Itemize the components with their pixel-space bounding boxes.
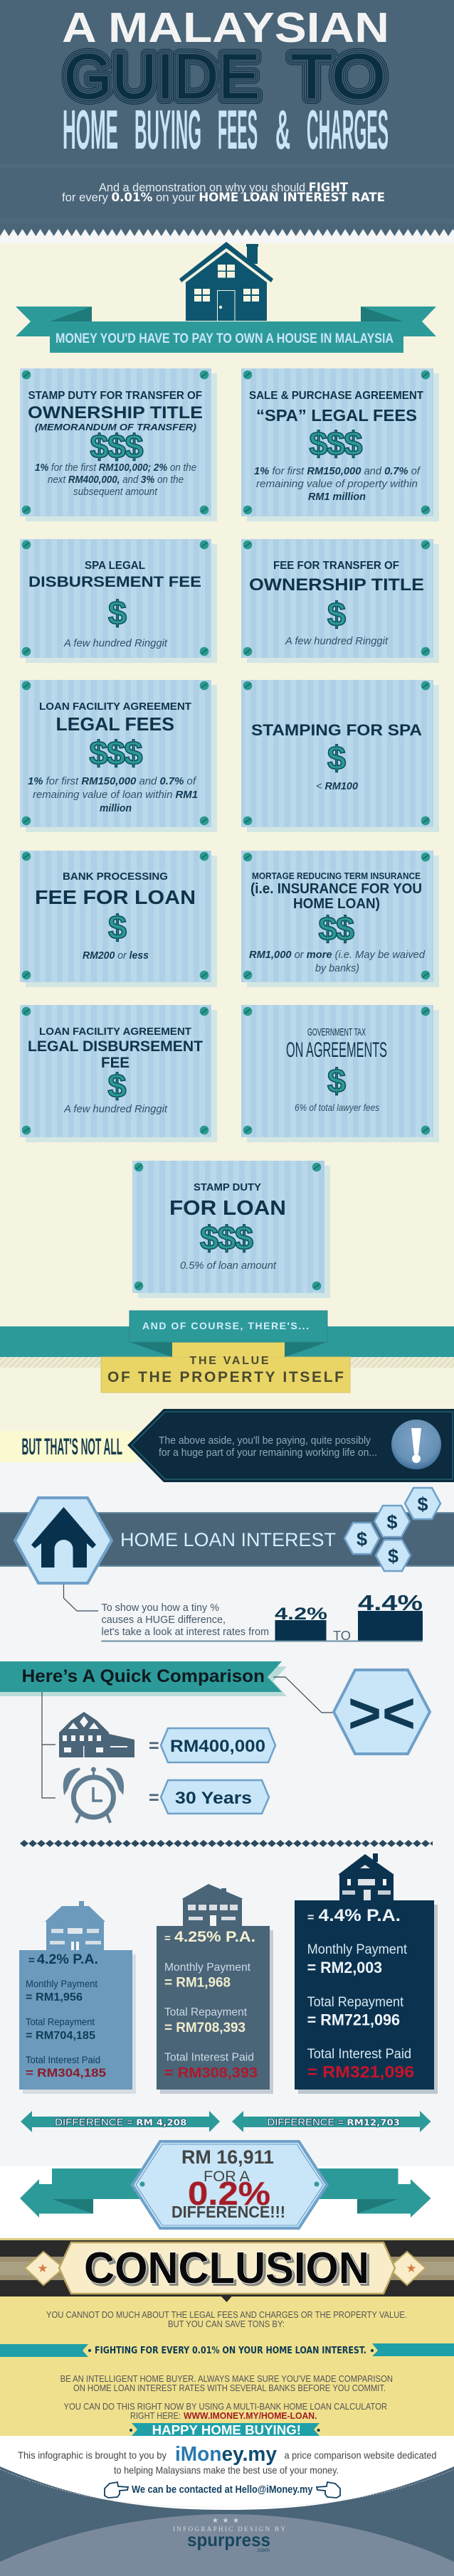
subtitle xyxy=(62,181,385,204)
figures: Monthly Payment xyxy=(26,1979,97,1989)
logo: iMoney.my: iMoney.my xyxy=(175,2443,277,2466)
title line: Guide To (striped letters): TO xyxy=(290,41,386,112)
card: loan facility agreement legal fees xyxy=(20,680,217,832)
figures: = RM708,393 xyxy=(164,2021,246,2035)
paragraph: intelligent home buyer: RIGHT HERE: xyxy=(130,2410,181,2421)
title line: Guide To (striped letters) xyxy=(64,41,386,112)
figures: = RM2,003 xyxy=(307,1959,382,1976)
icon: three dollar signs xyxy=(89,734,143,772)
card description xyxy=(254,466,421,503)
card: fee for transfer of ownership title xyxy=(241,539,439,663)
value pill: RM400,000: RM400,000 xyxy=(170,1737,265,1756)
contact line xyxy=(105,2482,340,2498)
card heading: LEGAL DISBURSEMENT xyxy=(28,1038,203,1055)
banner: fighting for every 0.01%: FIGHTING FOR EVERY 0.01% ON YOUR HOME LOAN INTEREST. xyxy=(95,2346,366,2356)
paragraph: save tons: BUT YOU CAN SAVE TONS BY: xyxy=(168,2319,285,2329)
icon: pointing hand right xyxy=(317,2482,340,2498)
banner: and of course, the value of the property xyxy=(0,1311,454,1393)
yellow label xyxy=(107,1355,344,1385)
icon: alarm clock xyxy=(64,1767,123,1823)
card heading xyxy=(249,390,423,425)
arrow: difference 4,208: DIFFERENCE = RM 4,208 xyxy=(55,2117,186,2128)
icon: dollar hexagons xyxy=(344,1488,440,1571)
design credit xyxy=(173,2517,286,2553)
title line: Guide To (striped letters): TO xyxy=(290,41,386,112)
card heading: SALE & PURCHASE AGREEMENT xyxy=(249,390,423,402)
card description: A few hundred Ringgit xyxy=(63,638,168,649)
card description xyxy=(28,776,198,814)
intro text: tiny percentage: To show you how a tiny % xyxy=(101,1602,219,1614)
card description: next RM400,000, and 3% on the xyxy=(48,474,184,486)
card heading: LEGAL FEES xyxy=(56,715,174,735)
card: loan facility legal disbursement fee xyxy=(20,1005,217,1142)
panel: 4.4% house xyxy=(295,1853,438,2094)
credit text xyxy=(18,2449,437,2476)
icon: dollar sign: $ xyxy=(108,594,127,632)
rate: 4.2% P.A. xyxy=(37,1952,98,1967)
icon: three dollar signs: $ xyxy=(107,734,125,772)
value pill: 30 years: 30 Years xyxy=(175,1789,252,1808)
title line: Guide To (striped letters): TO xyxy=(290,41,386,112)
icon: house A xyxy=(45,1901,105,1950)
figures: = RM704,185 xyxy=(26,2030,95,2042)
equals sign: = xyxy=(149,1736,159,1756)
figures: Monthly Payment xyxy=(307,1942,408,1957)
title line: Guide To (striped letters): GUIDE xyxy=(64,41,260,112)
credit text: a price comparison website dedicated xyxy=(285,2449,437,2461)
title line: Guide To (striped letters): TO xyxy=(290,41,386,112)
icon: dollar hexagons: $ xyxy=(386,1511,398,1533)
card description: remaining value of loan within RM1 xyxy=(33,789,198,801)
card heading: HOME LOAN) xyxy=(293,896,380,912)
conclusion header xyxy=(0,2238,454,2296)
card heading: GOVERNMENT TAX xyxy=(307,1026,366,1038)
icon: three dollar signs: $ xyxy=(125,427,144,465)
icon: three dollar signs xyxy=(309,425,363,462)
card heading: (MEMORANDUM OF TRANSFER) xyxy=(35,422,196,432)
icon: house xyxy=(179,242,273,321)
intro text: tiny percentage: causes a HUGE difference, xyxy=(101,1614,226,1626)
title line: Home Buying Fees & Charges: & xyxy=(275,98,290,161)
arrow: difference 12,703: DIFFERENCE = RM12,703 xyxy=(268,2117,400,2128)
connector lines xyxy=(42,1677,333,1798)
icon: two dollar signs: $ xyxy=(336,910,354,947)
card heading xyxy=(35,871,196,908)
figures xyxy=(26,1979,106,2080)
card description: remaining value of property within xyxy=(256,479,418,490)
card heading xyxy=(28,560,201,590)
hexagon: RM 16,911: FOR A xyxy=(204,2168,250,2185)
value: 4.4%: 4.4% xyxy=(358,1590,423,1615)
card description: 0.5% of loan amount xyxy=(180,1260,277,1272)
callout text: for a huge part of your remaining working life on... xyxy=(159,1447,377,1459)
figures: = RM1,968 xyxy=(164,1976,231,1990)
icon: dollar sign: $ xyxy=(327,739,346,777)
hexagon: RM 16,911 xyxy=(132,2141,327,2228)
card description: RM200 or less xyxy=(83,950,149,962)
figures: = RM721,096 xyxy=(307,2011,400,2028)
card description: 1% for the first RM100,000; 2% on the xyxy=(35,462,196,474)
hexagon: RM 16,911: 0.2% xyxy=(188,2175,270,2212)
icon: three dollar signs: $ xyxy=(89,734,108,772)
icon: two dollar signs: $ xyxy=(318,910,337,947)
value pill: RM400,000 xyxy=(161,1728,275,1762)
figures: = RM1,956 xyxy=(26,1991,83,2003)
card description: A few hundred Ringgit xyxy=(63,1104,168,1115)
arrow: difference 12,703 xyxy=(232,2111,431,2132)
icon: three dollar signs: $ xyxy=(344,425,363,462)
card heading: LOAN FACILITY AGREEMENT xyxy=(39,701,191,713)
callout text: The above aside, you'll be paying, quite possibly xyxy=(159,1435,371,1447)
icon: three dollar signs: $ xyxy=(327,425,345,462)
section band: home loan interest xyxy=(0,1488,454,1583)
card heading: LOAN FACILITY AGREEMENT xyxy=(39,1026,191,1038)
side diamonds with stars: ★ xyxy=(37,2262,48,2276)
paragraph: intelligent home buyer: YOU CAN DO THIS RIGHT NOW BY USING A MULTI-BANK HOME LOAN CALCULATOR xyxy=(64,2401,387,2412)
card heading: DISBURSEMENT FEE xyxy=(28,574,201,590)
title line: Home Buying Fees & Charges: FEES xyxy=(218,98,258,161)
icon: house C xyxy=(338,1853,394,1900)
icon: three dollar signs xyxy=(200,1219,253,1257)
card description: 6% of total lawyer fees xyxy=(295,1102,379,1113)
logo: spurpress: spurpress xyxy=(187,2529,270,2550)
icon: three dollar signs: $ xyxy=(200,1219,218,1257)
figures: = RM308,393 xyxy=(164,2065,258,2081)
subtitle: for every 0.01% on your HOME LOAN INTEREST RATE xyxy=(62,191,385,204)
icon: exclamation mark xyxy=(391,1420,441,1469)
icon: three dollar signs: $ xyxy=(90,427,109,465)
connector line xyxy=(64,1585,98,1611)
title line: A Malaysian: A MALAYSIAN xyxy=(62,4,389,51)
conclusion heading: CONCLUSION xyxy=(86,2246,371,2295)
ribbon: money you'd have to pay xyxy=(16,307,436,353)
title line: Guide To (striped letters): GUIDE xyxy=(64,41,260,112)
rate: = xyxy=(28,1954,35,1966)
tab text: AND OF COURSE, THERE'S... xyxy=(142,1320,309,1331)
intro text: tiny percentage: let's take a look at interest rates from xyxy=(101,1627,269,1638)
panel: 4.25% house xyxy=(157,1884,273,2094)
icon: house B xyxy=(182,1884,243,1926)
hexagon: RM 16,911: DIFFERENCE!!! xyxy=(171,2203,285,2221)
card description: RM1,000 or more (i.e. May be waived xyxy=(249,949,426,961)
ribbon: total difference xyxy=(20,2141,431,2228)
title xyxy=(62,4,389,161)
card: mortgage reducing term insurance xyxy=(241,851,439,987)
intro text: tiny percentage xyxy=(101,1602,269,1638)
card: stamp duty for loan xyxy=(132,1161,330,1298)
banner: fighting for every 0.01% xyxy=(0,2343,454,2357)
card heading: STAMPING FOR SPA xyxy=(251,721,422,739)
arrow: difference 4,208 xyxy=(21,2111,220,2132)
card: stamping for SPA xyxy=(241,680,439,832)
icon: large house xyxy=(59,1712,134,1757)
yellow label: OF THE PROPERTY ITSELF xyxy=(107,1369,344,1385)
card heading: MORTAGE REDUCING TERM INSURANCE xyxy=(252,871,421,881)
figures: Total Repayment xyxy=(164,2006,248,2018)
ribbon: here's a quick comparison xyxy=(0,1661,287,1696)
equals sign: = xyxy=(149,1788,159,1808)
icon: comparison hexagon xyxy=(334,1670,430,1754)
card description: RM1 million xyxy=(308,491,366,503)
footer background xyxy=(0,2436,454,2576)
chart: 4.2% to 4.4% bars xyxy=(101,1590,423,1643)
card heading: OWNERSHIP TITLE xyxy=(28,403,203,422)
side diamonds with stars xyxy=(25,2252,426,2285)
figures: Total Interest Paid xyxy=(164,2051,254,2064)
title line: Guide To (striped letters): GUIDE xyxy=(64,41,260,112)
rate: = xyxy=(164,1932,171,1944)
rate: = xyxy=(307,1912,314,1924)
header banner xyxy=(0,0,454,243)
card description: < RM100 xyxy=(316,781,358,792)
paragraph: save tons: YOU CANNOT DO MUCH ABOUT THE LEGAL FEES AND CHARGES OR THE PROPERTY VALUE. xyxy=(46,2309,407,2320)
icon: dollar hexagons: $ xyxy=(388,1545,398,1567)
card heading: FEE FOR LOAN xyxy=(35,886,196,908)
icon: two dollar signs xyxy=(318,910,354,947)
figures: Total Interest Paid xyxy=(26,2055,100,2065)
card: government tax on agreements xyxy=(241,1005,439,1142)
rate: 4.25% P.A. xyxy=(174,1929,255,1945)
panel: 4.2% house xyxy=(19,1901,136,2094)
title line: Home Buying Fees & Charges: HOME xyxy=(63,98,118,161)
icon: three dollar signs: $ xyxy=(217,1219,236,1257)
paragraph: intelligent home buyer: ON HOME LOAN INTEREST RATES WITH SEVERAL BANKS BEFORE YOU COMMIT. xyxy=(73,2383,386,2393)
icon: dollar hexagons: $ xyxy=(357,1528,367,1550)
icon: three dollar signs xyxy=(90,427,144,465)
figures: Monthly Payment xyxy=(164,1962,251,1974)
conclusion header: CONCLUSION xyxy=(84,2244,369,2293)
title line: Guide To (striped letters): GUIDE xyxy=(64,41,260,112)
paragraph: save tons xyxy=(46,2309,407,2329)
contact text: We can be contacted at Hello@iMoney.my xyxy=(132,2484,313,2496)
logo suffix: .com xyxy=(256,2547,270,2553)
figures xyxy=(164,1962,258,2081)
card description: 1% for first RM150,000 and 0.7% of xyxy=(254,466,421,477)
card description: million xyxy=(100,803,132,814)
word: to: TO xyxy=(333,1629,351,1643)
yellow label: THE VALUE xyxy=(189,1355,269,1367)
figures: Total Repayment xyxy=(307,1995,404,2010)
card heading: (i.e. INSURANCE FOR YOU xyxy=(250,881,422,897)
card description: subsequent amount xyxy=(73,486,158,498)
card heading: STAMP DUTY xyxy=(194,1182,261,1193)
paragraph: intelligent home buyer: WWW.IMONEY.MY/HOME-LOAN. xyxy=(184,2410,317,2421)
hexagon: RM 16,911: RM 16,911 xyxy=(181,2146,274,2168)
callout: but that's not all xyxy=(0,1409,454,1482)
credit label: INFOGRAPHIC DESIGN BY xyxy=(173,2526,286,2533)
card heading: OWNERSHIP TITLE xyxy=(249,575,424,595)
card heading xyxy=(28,390,203,432)
icon: three dollar signs: $ xyxy=(124,734,143,772)
card description xyxy=(249,949,426,974)
card heading xyxy=(249,560,424,595)
callout text xyxy=(159,1435,377,1459)
card heading: “SPA” LEGAL FEES xyxy=(256,406,417,425)
title line: Guide To (striped letters): TO xyxy=(290,41,386,112)
icon: hexagon house xyxy=(15,1498,112,1583)
card heading: STAMP DUTY FOR TRANSFER OF xyxy=(28,390,202,402)
card heading xyxy=(39,701,191,735)
title line: Guide To (striped letters): TO xyxy=(290,41,386,112)
figures: = RM321,096 xyxy=(307,2063,414,2081)
value pill: 30 years xyxy=(161,1780,269,1814)
rate: 4.4% P.A. xyxy=(319,1906,401,1925)
icon: dollar sign: $ xyxy=(327,1062,346,1100)
title line: Home Buying Fees & Charges xyxy=(63,98,389,161)
card heading xyxy=(286,1026,387,1062)
card heading: BANK PROCESSING xyxy=(63,871,168,883)
card description: 1% for first RM150,000 and 0.7% of xyxy=(28,776,197,787)
ribbon heading: Here’s A Quick Comparison xyxy=(21,1666,265,1686)
card heading xyxy=(250,871,422,912)
icon: comparison hexagon: < xyxy=(382,1681,416,1745)
card heading: FOR LOAN xyxy=(169,1197,286,1220)
title line: Guide To (striped letters): GUIDE xyxy=(64,41,260,112)
card description: by banks) xyxy=(315,963,359,974)
figures: Total Interest Paid xyxy=(307,2047,411,2062)
icon: dollar sign: $ xyxy=(327,595,346,633)
icon: dollar sign: $ xyxy=(108,908,127,946)
callout: but that's not all: BUT THAT'S NOT ALL xyxy=(21,1434,122,1459)
side diamonds with stars: ★ xyxy=(406,2262,417,2276)
credit text: to helping Malaysians make the best use of your money. xyxy=(114,2464,339,2476)
icon: comparison hexagon: > xyxy=(348,1681,381,1745)
stars: ★★★ xyxy=(212,2517,239,2525)
card heading: FEE xyxy=(101,1055,130,1071)
icon: three dollar signs: $ xyxy=(309,425,328,462)
icon: pointing hand left xyxy=(105,2482,128,2498)
subtitle: And a demonstration on why you should FIGHT xyxy=(99,181,349,194)
ribbon heading: MONEY YOU'D HAVE TO PAY TO OWN A HOUSE IN MALAYSIA xyxy=(56,331,394,346)
icon: dollar hexagons: $ xyxy=(417,1494,428,1515)
title line: Home Buying Fees & Charges: BUYING xyxy=(134,98,201,161)
icon: three dollar signs: $ xyxy=(235,1219,253,1257)
card: stamp duty for transfer of ownership title xyxy=(20,368,217,521)
card heading: FEE FOR TRANSFER OF xyxy=(273,560,399,572)
card description xyxy=(35,462,196,498)
card heading xyxy=(169,1182,286,1220)
value: 4.2%: 4.2% xyxy=(275,1604,327,1624)
figures xyxy=(307,1942,414,2081)
paragraph: intelligent home buyer xyxy=(60,2373,393,2421)
credit text: This infographic is brought to you by xyxy=(18,2449,167,2461)
card heading xyxy=(28,1026,203,1071)
card: bank processing fee for loan xyxy=(20,851,217,987)
card description: A few hundred Ringgit xyxy=(285,636,389,647)
figures: = RM304,185 xyxy=(26,2067,106,2080)
figures: Total Repayment xyxy=(26,2017,95,2027)
icon: dollar sign: $ xyxy=(107,1067,127,1105)
panel: conclusion xyxy=(0,2296,454,2437)
title line: Guide To (striped letters): GUIDE xyxy=(64,41,260,112)
banner: happy home buying: HAPPY HOME BUYING! xyxy=(152,2423,301,2437)
title line: Guide To (striped letters): GUIDE xyxy=(64,41,260,112)
title line: Guide To (striped letters): TO xyxy=(290,41,386,112)
band heading: HOME LOAN INTEREST xyxy=(120,1529,336,1550)
card heading: SPA LEGAL xyxy=(85,560,145,572)
card: SPA legal fees xyxy=(241,368,439,521)
icon: three dollar signs: $ xyxy=(107,427,126,465)
card: SPA legal disbursement fee xyxy=(20,539,217,663)
paragraph: intelligent home buyer: BE AN INTELLIGENT HOME BUYER. ALWAYS MAKE SURE YOU'VE MADE COMPARISON xyxy=(60,2373,393,2384)
